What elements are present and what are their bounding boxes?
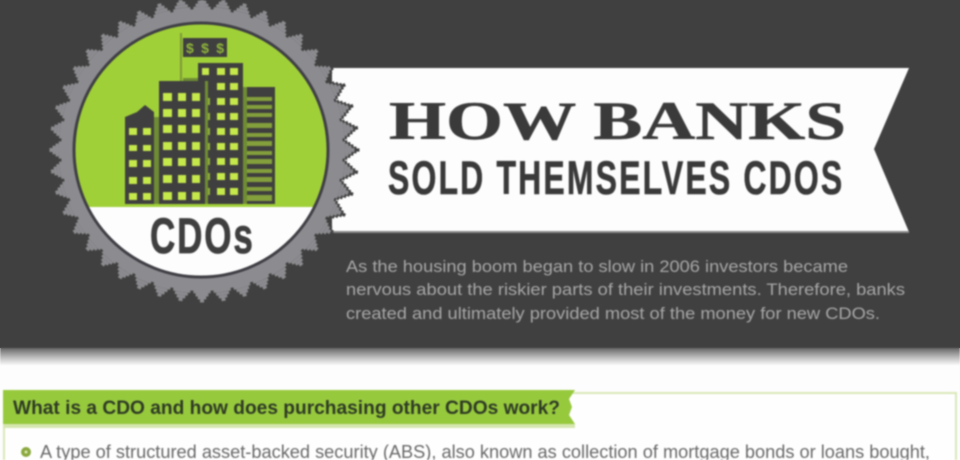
disc outline	[74, 23, 328, 277]
badge	[46, 0, 358, 306]
olive shadows	[154, 78, 247, 204]
flag with dollar signs: $$$	[186, 40, 224, 56]
white lower segment	[88, 207, 314, 277]
title	[388, 91, 846, 205]
section heading banner: What is a CDO and how does purchasing other CDOs work?	[13, 398, 560, 419]
intro line 1: As the housing boom began to slow in 2006 investors became	[346, 257, 848, 276]
gear seal	[51, 0, 353, 301]
icon: city buildings	[125, 33, 275, 204]
title line: how banks: HOW BANKS	[389, 91, 846, 151]
badge label: CDOs	[150, 209, 253, 265]
flag with dollar signs	[180, 33, 227, 81]
badge outline against ribbon	[46, 0, 358, 306]
intro paragraph	[346, 257, 905, 323]
title line: sold themselves cdos: SOLD THEMSELVES CDOS	[388, 152, 842, 205]
building: right striped	[247, 87, 275, 204]
panel: what is a CDO	[3, 390, 956, 460]
panel frame	[4, 393, 956, 460]
bullet	[21, 447, 31, 457]
building: tall rear	[198, 63, 243, 204]
green disc	[74, 23, 328, 277]
section heading banner	[3, 390, 575, 428]
building: centre	[159, 81, 208, 204]
building: left	[125, 105, 154, 204]
ribbon banner	[332, 68, 909, 233]
intro line 2: nervous about the riskier parts of their investments. Therefore, banks	[346, 280, 905, 299]
intro line 3: created and ultimately provided most of the money for new CDOs.	[346, 304, 880, 323]
